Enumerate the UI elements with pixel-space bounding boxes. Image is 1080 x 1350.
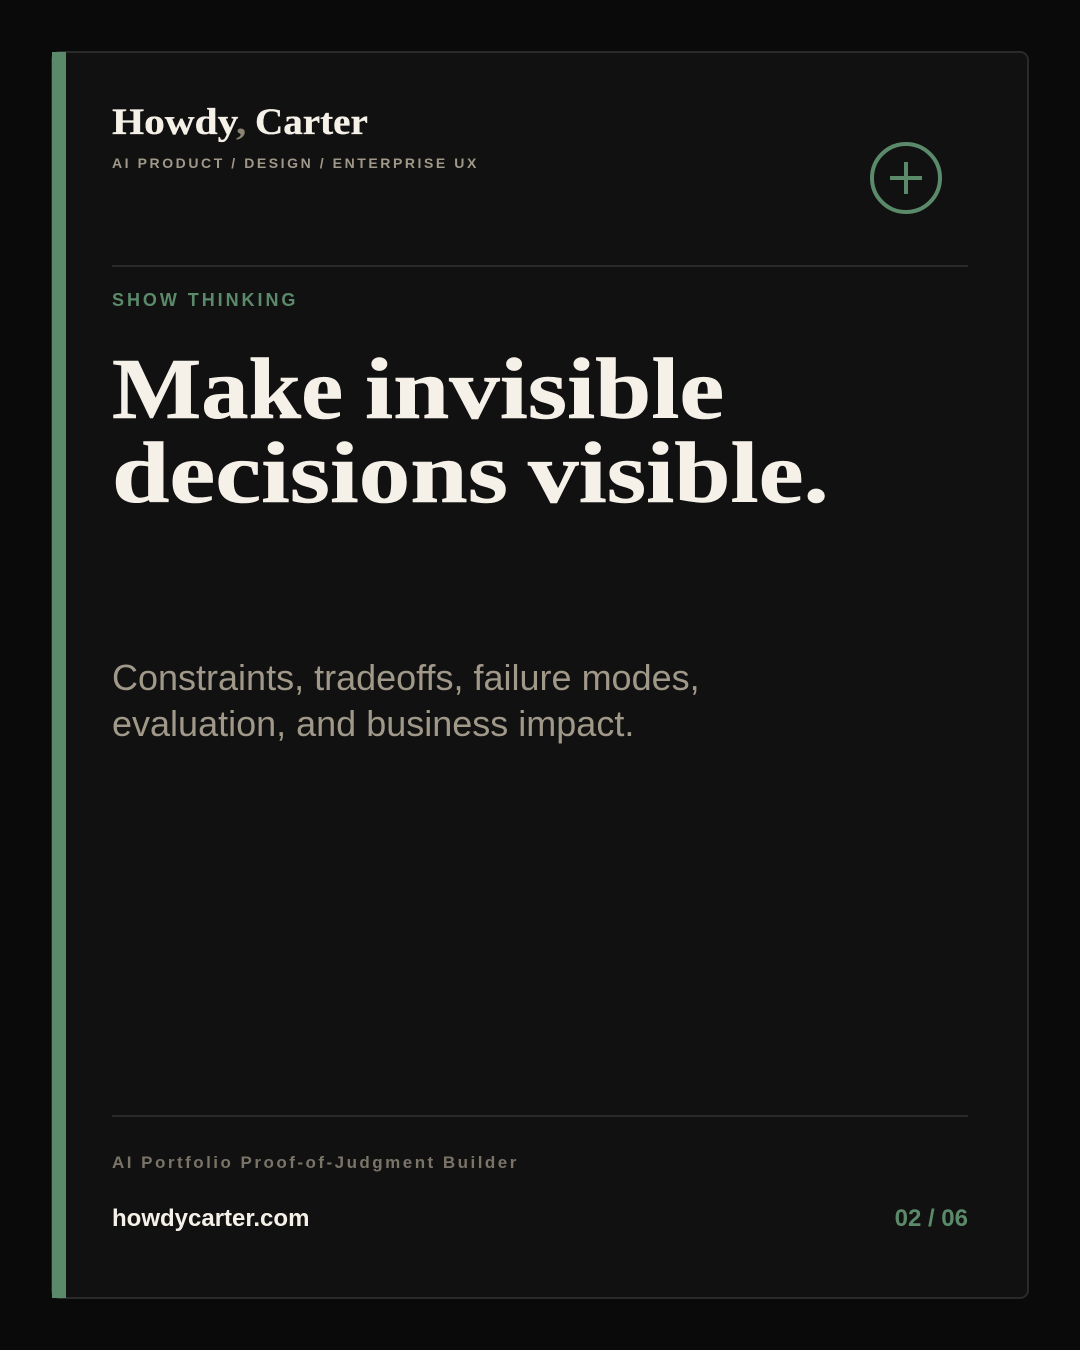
brand name: Carter <box>255 102 368 143</box>
headline: decisions <box>112 424 508 521</box>
bottom divider <box>112 1115 968 1117</box>
eyebrow: SHOW THINKING <box>112 290 298 310</box>
subheading: evaluation, and business impact. <box>112 703 634 744</box>
brand name: Howdy, <box>112 102 246 143</box>
page number: 02 / 06 <box>895 1205 968 1232</box>
footer product label: AI Portfolio Proof-of-Judgment Builder <box>112 1153 519 1172</box>
subheading: Constraints, tradeoffs, failure modes, <box>112 657 700 698</box>
footer url: howdycarter.com <box>112 1205 309 1232</box>
headline: Make <box>112 340 343 437</box>
headline: visible. <box>528 424 829 521</box>
headline: invisible <box>365 340 724 437</box>
icon: plus in circle <box>870 142 942 214</box>
headline <box>112 340 829 521</box>
brand name <box>112 102 368 143</box>
top divider <box>112 265 968 267</box>
brand tagline: AI PRODUCT / DESIGN / ENTERPRISE UX <box>112 155 479 171</box>
subheading <box>112 657 700 744</box>
